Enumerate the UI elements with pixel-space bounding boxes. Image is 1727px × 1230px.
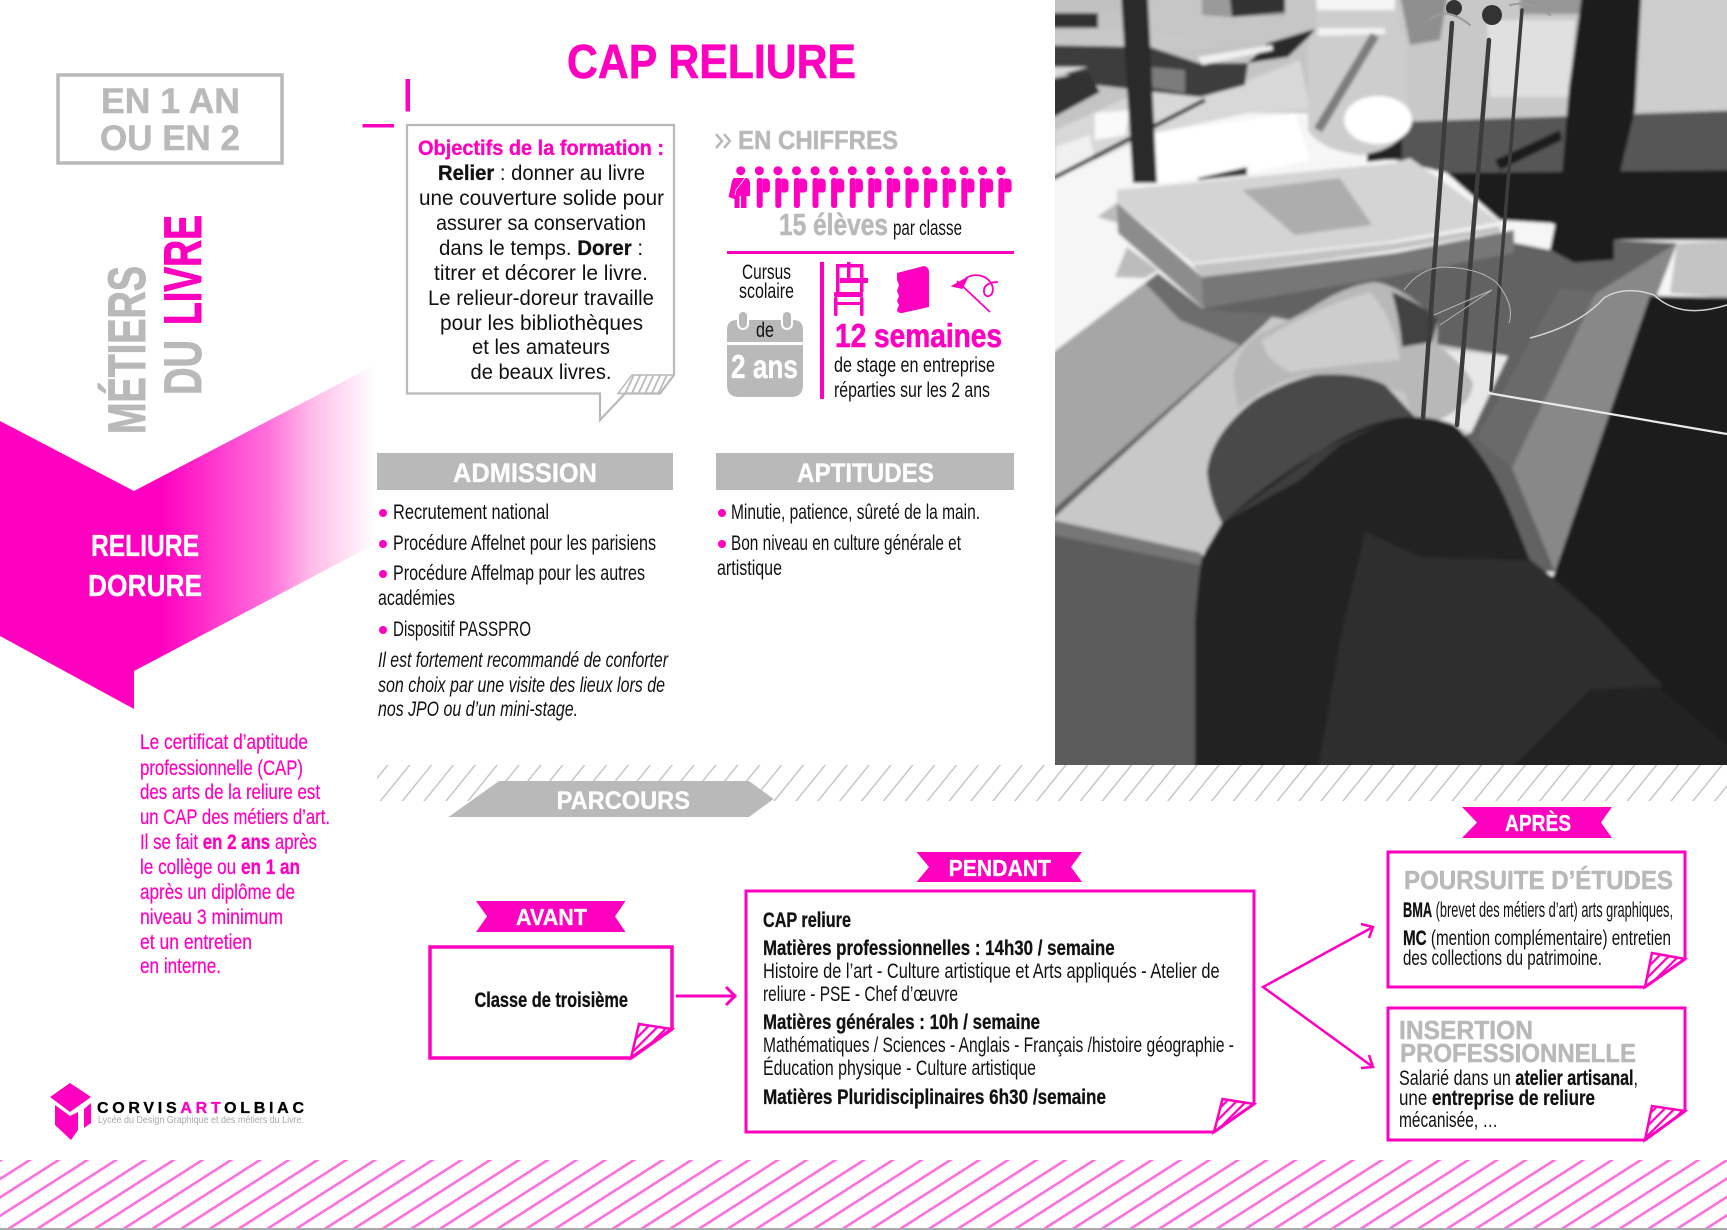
table boards — [1030, 240, 1677, 572]
pink chevron banner: RELIURE — [91, 528, 199, 563]
note card: programme: Mathématiques / Sciences - Anglais - Français /histoire géographie - — [763, 1034, 1234, 1057]
CAP description: professionnelle (CAP) — [140, 757, 303, 780]
panel: admission: nos JPO ou d’un mini-stage. — [378, 698, 578, 721]
CAP description — [140, 731, 330, 978]
heading: aptitudes — [716, 453, 1014, 490]
stat: 15 students per class: par classe — [893, 217, 962, 240]
panel: avant — [430, 901, 672, 1058]
note card: poursuite d'études: POURSUITE D’ÉTUDES — [1404, 865, 1673, 895]
panel: admission — [377, 453, 673, 721]
note card: programme: Matières générales : 10h / semaine — [763, 1011, 1040, 1034]
panel: aptitudes: Bon niveau en culture générale et — [731, 532, 961, 555]
speech bubble: objectifs de la formation: une couverture solide pour — [419, 187, 664, 210]
speech bubble: objectifs de la formation — [407, 125, 674, 420]
note card: poursuite d'études — [1388, 852, 1685, 987]
ribbon: avant — [476, 901, 626, 932]
note card: insertion professionnelle: INSERTION — [1399, 1015, 1533, 1045]
note card: programme: Matières professionnelles : 14h30 / semaine — [763, 937, 1115, 960]
note card: programme: Histoire de l’art - Culture artistique et Arts appliqués - Atelier de — [763, 960, 1220, 983]
vertical heading: métiers du livre — [97, 215, 213, 434]
note card: classe de troisième: Classe de troisième — [474, 989, 628, 1012]
right side — [1670, 240, 1727, 300]
CAP description: Il se fait en 2 ans après — [140, 831, 317, 854]
top-left floor — [1055, 0, 1311, 177]
note card: programme: CAP reliure — [763, 909, 851, 932]
panel: pendant — [746, 852, 1254, 1132]
lower table — [1055, 533, 1204, 765]
panel: admission: Procédure Affelnet pour les parisiens — [393, 532, 656, 555]
binding cords — [1423, 0, 1550, 425]
panel: admission: Recrutement national — [393, 501, 549, 524]
panel: aptitudes: Minutie, patience, sûreté de la main. — [731, 501, 980, 524]
note card: programme: reliure - PSE - Chef d’œuvre — [763, 983, 958, 1006]
speech bubble: objectifs de la formation: assurer sa conservation — [436, 212, 646, 235]
logo: Corvisart Tolbiac: Lycée du Design Graphique et des métiers du Livre. — [98, 1115, 304, 1126]
note card: insertion professionnelle: Salarié dans un atelier artisanal, — [1399, 1067, 1638, 1090]
icon: needle and thread — [953, 275, 998, 312]
stat: 12 weeks of internship: 12 semaines — [835, 317, 1002, 354]
heading: en chiffres: EN CHIFFRES — [738, 127, 898, 155]
panel: admission: Dispositif PASSPRO — [393, 618, 531, 641]
note card: classe de troisième — [430, 947, 672, 1058]
panel: admission: son choix par une visite des lieux lors de — [378, 674, 665, 697]
photograph: hand sewing a book on a binding frame — [1030, 0, 1727, 800]
pink chevron banner — [0, 365, 375, 709]
stat: 12 weeks of internship: réparties sur les 2 ans — [834, 379, 990, 402]
white glare — [1155, 113, 1310, 183]
background wall — [1395, 0, 1727, 125]
speech bubble: objectifs de la formation: pour les bibliothèques — [440, 312, 643, 335]
panel: en chiffres — [716, 127, 1014, 402]
note card: programme — [746, 891, 1254, 1132]
upper book — [1097, 203, 1118, 223]
ribbon: pendant: PENDANT — [949, 855, 1051, 881]
duration box — [58, 75, 282, 163]
panel: aptitudes — [716, 453, 1014, 580]
ribbon: avant: AVANT — [516, 904, 587, 930]
icon: calendar — [727, 311, 803, 397]
CAP description: des arts de la reliure est — [140, 781, 320, 804]
CAP description: un CAP des métiers d’art. — [140, 806, 330, 829]
speech bubble: objectifs de la formation: Relier : donner au livre — [438, 162, 645, 185]
speech bubble: objectifs de la formation: et les amateurs — [472, 336, 610, 359]
front leg and rail — [1040, 100, 1205, 185]
black sleeve — [1207, 374, 1415, 523]
note card: insertion professionnelle: PROFESSIONNELLE — [1400, 1038, 1636, 1068]
note card: programme: Éducation physique - Culture artistique — [763, 1057, 1036, 1080]
logo: Corvisart Tolbiac: CORVISARTOLBIAC — [97, 1100, 304, 1117]
CAP description: niveau 3 minimum — [140, 906, 283, 929]
heading: aptitudes: APTITUDES — [797, 458, 934, 488]
CAP description: en interne. — [140, 955, 221, 978]
note card: insertion professionnelle — [1388, 1008, 1685, 1140]
glass jar — [1307, 10, 1408, 155]
crop marks — [362, 79, 410, 128]
note card: insertion professionnelle: une entreprise de reliure — [1399, 1087, 1595, 1110]
speech bubble: objectifs de la formation: dans le temps. Dorer : — [439, 237, 643, 260]
speech bubble: objectifs de la formation: de beaux livres. — [470, 361, 612, 384]
panel: admission: Procédure Affelmap pour les autres — [393, 562, 645, 585]
arrow: avant to pendant — [676, 987, 735, 1005]
CAP description: après un diplôme de — [140, 881, 295, 904]
note card: poursuite d'études: des collections du patrimoine. — [1403, 947, 1602, 970]
duration box: OU EN 2 — [100, 119, 240, 158]
arrows: pendant to après — [1263, 924, 1373, 1068]
heading: parcours arrow: PARCOURS — [557, 787, 690, 815]
speech bubble: objectifs de la formation: titrer et décorer le livre. — [434, 262, 648, 285]
duration box: EN 1 AN — [101, 82, 240, 121]
logo: Corvisart Tolbiac — [50, 1083, 304, 1140]
panel: admission: Il est fortement recommandé de conforter — [378, 649, 669, 672]
grey hatched band — [377, 765, 1727, 801]
ribbon: après — [1462, 807, 1612, 838]
ribbon: après: APRÈS — [1505, 809, 1571, 836]
stat: 12 weeks of internship — [834, 317, 1002, 402]
stat: school course: de — [756, 319, 774, 342]
stat: school course: 2 ans — [731, 348, 798, 385]
icon: book — [897, 266, 929, 313]
CAP description: Le certificat d’aptitude — [140, 731, 308, 754]
note card: programme: Matières Pluridisciplinaires 6h30 /semaine — [763, 1086, 1106, 1109]
stat: school course: Cursus — [742, 261, 791, 284]
pink chevron banner: DORURE — [88, 568, 202, 603]
heading: parcours arrow — [449, 781, 774, 817]
icon: printing press — [834, 262, 868, 316]
note card: insertion professionnelle: mécanisée, … — [1399, 1109, 1498, 1132]
stat: school course — [727, 261, 803, 397]
stat: 12 weeks of internship: de stage en entreprise — [834, 354, 995, 377]
ribbon: pendant — [916, 852, 1082, 882]
icon row: 15 students — [728, 166, 1012, 208]
panel: aptitudes: artistique — [717, 557, 782, 580]
CAP description: et un entretien — [140, 931, 252, 954]
vertical heading: métiers du livre: LIVRE — [154, 215, 213, 325]
icon: cube logo — [50, 1083, 91, 1140]
stat: school course: scolaire — [739, 280, 794, 303]
heading: admission — [377, 453, 673, 490]
CAP description: le collège ou en 1 an — [140, 856, 300, 879]
panel: admission: académies — [378, 587, 455, 610]
speech bubble: objectifs de la formation: Le relieur-doreur travaille — [428, 287, 654, 310]
back right leg — [1550, 0, 1642, 263]
title: CAP RELIURE — [567, 36, 856, 89]
heading: admission: ADMISSION — [453, 458, 597, 488]
stacked books — [1030, 0, 1118, 12]
storage box — [1386, 108, 1727, 176]
sewing thread — [1404, 267, 1727, 434]
stat: 15 students per class: 15 élèves — [779, 207, 888, 242]
hand — [1233, 282, 1473, 420]
panel: après — [1388, 807, 1685, 1140]
open book — [1030, 317, 1508, 553]
speech bubble: objectifs de la formation: Objectifs de la formation : — [418, 137, 664, 160]
vertical heading: métiers du livre: MÉTIERS — [97, 266, 157, 434]
pink hatched footer band — [0, 1160, 1727, 1228]
vertical heading: métiers du livre: DU — [154, 340, 213, 395]
